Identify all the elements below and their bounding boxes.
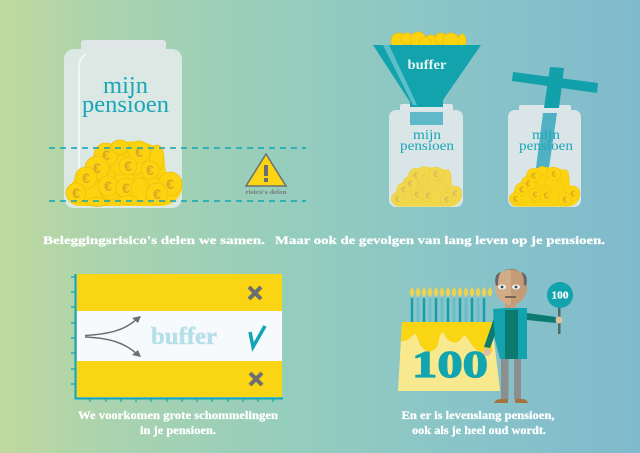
- jar label: mijn: [413, 128, 441, 143]
- caption: fluctuations: We voorkomen grote schommelingen: [78, 408, 278, 422]
- funnel label: buffer: [408, 57, 446, 72]
- coin pile: €: [513, 194, 518, 204]
- buffer label: buffer: [151, 324, 217, 350]
- dashed line upper: [49, 147, 306, 149]
- coin pile: €: [72, 185, 80, 201]
- jar lid: [519, 105, 571, 112]
- coin pile: €: [124, 158, 132, 174]
- coin pile: €: [104, 178, 112, 194]
- vest: [493, 308, 527, 359]
- coin pile: €: [519, 185, 524, 195]
- jar highlight: [79, 54, 86, 200]
- coin pile: €: [153, 186, 161, 202]
- neck: [505, 302, 516, 313]
- coin pile faded: [391, 166, 462, 207]
- coin pile: €: [562, 194, 567, 204]
- jar body: [389, 110, 463, 207]
- chart: buffer bands: [71, 274, 283, 402]
- candle flames: [410, 287, 492, 297]
- jar lid: [81, 40, 166, 52]
- light candles: [418, 298, 478, 322]
- cake number: 100: [412, 344, 488, 386]
- legs: [501, 358, 508, 399]
- illustration: old man with sign: [483, 269, 573, 403]
- sign stick: [558, 305, 560, 334]
- chart axes: [76, 274, 283, 398]
- heading: longevity consequences: Maar ook de gevolgen van lang leven op je pensioen.: [275, 233, 605, 247]
- coin pile faded: €: [425, 191, 430, 201]
- coin pile: €: [93, 160, 101, 176]
- sign disc: [547, 282, 573, 308]
- coin pile faded: €: [408, 179, 413, 189]
- icon: cross lower: [250, 373, 262, 385]
- dark candles: [412, 298, 484, 322]
- caption: fluctuations: [78, 408, 278, 437]
- panel: funnel jar: [373, 32, 481, 207]
- icon: cross upper: [249, 287, 261, 299]
- arrows diverging: [85, 316, 141, 357]
- head: [495, 269, 527, 305]
- plunger handle: [512, 67, 598, 108]
- coin pile faded: €: [452, 188, 457, 198]
- upper yellow band: [77, 274, 282, 311]
- cake body: [398, 322, 500, 391]
- jar body: [508, 110, 581, 207]
- panel: large jar with coins: [64, 40, 182, 208]
- jar label: pensioen: [82, 92, 169, 118]
- illustration: birthday cake: [398, 287, 500, 391]
- caption: lifelong pension: En er is levenslang pensioen,: [402, 408, 554, 422]
- coins above funnel: [390, 32, 466, 45]
- white buffer band: [77, 311, 282, 361]
- coin pile: €: [122, 180, 130, 196]
- right arm and hand: [527, 313, 556, 323]
- coin pile: €: [166, 176, 174, 192]
- coin pile: €: [102, 147, 110, 163]
- coin pile: €: [570, 188, 575, 198]
- shirt: [505, 310, 518, 359]
- coin pile faded: €: [415, 190, 420, 200]
- caption: lifelong pension: ook als je heel oud wordt.: [412, 423, 546, 437]
- icon: warning triangle: [246, 154, 287, 196]
- coin pile: [509, 166, 580, 207]
- coin pile: €: [146, 162, 154, 178]
- jar label: pensioen: [400, 139, 454, 154]
- plunger shaft in jar: [536, 113, 557, 168]
- coin pile: €: [531, 171, 536, 181]
- coin pile: €: [135, 144, 143, 160]
- jar body: [64, 49, 182, 208]
- jar lid: [400, 104, 453, 112]
- caption: lifelong pension: [402, 408, 554, 437]
- coin pile: €: [82, 170, 90, 186]
- coin pile: €: [526, 179, 531, 189]
- coin pile: €: [533, 190, 538, 200]
- jar label: [519, 128, 573, 154]
- panel: jar with plunger: [508, 67, 598, 207]
- cake icing: [401, 322, 492, 353]
- coin pile faded: €: [395, 194, 400, 204]
- lower yellow band: [77, 361, 282, 397]
- coin pile: €: [551, 169, 556, 179]
- funnel spout in jar: [410, 112, 443, 125]
- chart ticks: [71, 277, 273, 402]
- caption: fluctuations: in je pensioen.: [140, 423, 216, 437]
- dashed line lower: [49, 200, 306, 202]
- left arm and hand: [484, 315, 499, 348]
- funnel: [373, 45, 481, 107]
- icon: check: [250, 326, 265, 347]
- jar label: pensioen: [519, 139, 573, 154]
- jar label: [82, 73, 169, 118]
- jar label: mijn: [532, 128, 560, 143]
- shoes: [494, 399, 528, 403]
- hand on stick: [556, 316, 562, 324]
- funnel highlight: [383, 45, 417, 105]
- coin pile faded: €: [413, 171, 418, 181]
- jar label: mijn: [103, 73, 148, 99]
- icon: warning triangle: risico's delen: [246, 189, 287, 196]
- coin pile faded: €: [401, 185, 406, 195]
- heading: shared investment risks: Beleggingsrisico's delen we samen.: [43, 233, 265, 247]
- sign number: 100: [552, 290, 568, 302]
- coin pile: [66, 140, 182, 206]
- coin pile faded: €: [444, 194, 449, 204]
- coin pile: €: [543, 191, 548, 201]
- jar label: [400, 128, 454, 154]
- coin pile faded: €: [433, 169, 438, 179]
